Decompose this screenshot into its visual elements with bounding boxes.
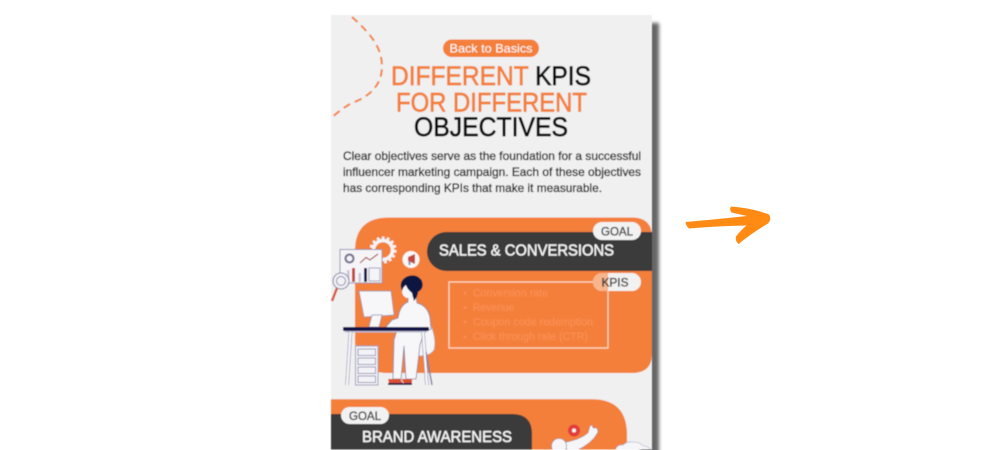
- chart board: [340, 250, 382, 283]
- icon: gear: [371, 238, 395, 262]
- heading bar: brand awareness: BRAND AWARENESS: [362, 429, 512, 446]
- title: FOR DIFFERENT: [396, 88, 587, 118]
- section: sales and conversions: [355, 218, 652, 373]
- goal tag: GOAL: [601, 224, 633, 238]
- intro text: [343, 149, 641, 195]
- arrow: [686, 206, 770, 244]
- section: brand awareness: [331, 399, 651, 450]
- chair: [414, 321, 435, 356]
- person: [385, 275, 431, 385]
- drawer unit: [356, 346, 378, 385]
- icon: magnifier: [332, 273, 349, 301]
- icon: target: [568, 424, 580, 436]
- goal tag: [593, 222, 641, 240]
- goal tag: [341, 407, 389, 424]
- heading bar: sales and conversions: SALES & CONVERSIONS: [439, 243, 614, 260]
- shadow: [640, 23, 659, 450]
- icon: megaphone: [402, 251, 420, 268]
- monitor: [359, 291, 394, 327]
- badge: back to basics: [443, 40, 539, 57]
- kpis tag: [593, 273, 641, 291]
- goal tag: GOAL: [349, 409, 381, 423]
- cloud: [615, 442, 651, 450]
- kpi list box: [449, 282, 608, 348]
- illustration: person at desk with charts: [332, 238, 435, 385]
- kpi list box: Click through rate (CTR): [473, 331, 588, 343]
- desk: [343, 327, 429, 385]
- orange card: [355, 218, 652, 373]
- title: DIFFERENT KPIS: [391, 61, 591, 91]
- heading bar: sales and conversions: [427, 232, 652, 271]
- title: [391, 61, 591, 142]
- dashed curve: [331, 17, 382, 118]
- title: OBJECTIVES: [414, 112, 568, 142]
- illustration: person raising arm: [552, 425, 598, 450]
- kpi list box: Coupon code redemption: [473, 317, 593, 329]
- kpis tag: KPIS: [602, 276, 628, 290]
- kpi list box: Conversion rate: [473, 288, 548, 300]
- intro text: has corresponding KPIs that make it measurable.: [343, 181, 602, 195]
- intro text: Clear objectives serve as the foundation for a successful: [343, 149, 641, 163]
- intro text: influencer marketing campaign. Each of these objectives: [343, 165, 641, 179]
- orange card: [331, 399, 627, 450]
- kpi list box: Revenue: [473, 302, 514, 314]
- heading bar: brand awareness: [331, 414, 532, 450]
- infographic panel: [331, 15, 652, 450]
- badge: back to basics: Back to Basics: [450, 41, 532, 55]
